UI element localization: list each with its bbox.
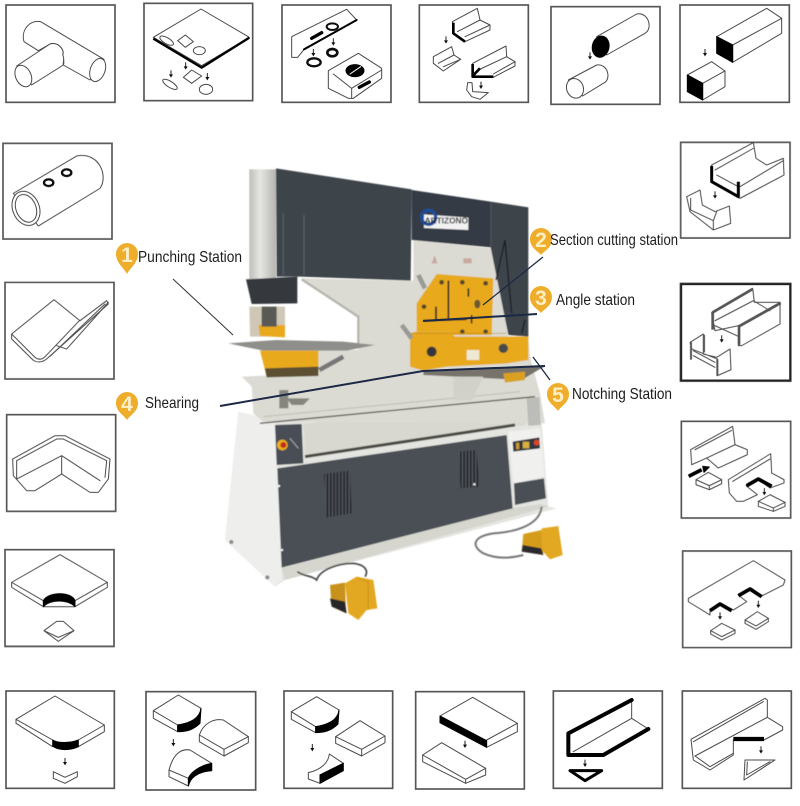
- upper dark covers: [276, 168, 528, 337]
- machine throat arm: [279, 390, 310, 408]
- panel: tube punching: [3, 143, 112, 239]
- panel: angle corner notch: [682, 691, 791, 788]
- panel: tee pipe: [6, 5, 115, 102]
- panel: round bar cutting: [551, 7, 660, 104]
- callout 4: shearing: Shearing: [145, 395, 199, 412]
- control box: [508, 428, 546, 505]
- brand logo: [422, 210, 468, 230]
- callout 5: notching station: 5: [552, 384, 564, 407]
- foot pedal left: [297, 563, 377, 620]
- punch column: [249, 169, 276, 279]
- callout 5: notching station: [547, 383, 672, 411]
- callout 1: punching station: Punching Station: [138, 249, 242, 266]
- leader lines: [173, 257, 550, 406]
- callout 2: section cutting station: 2: [535, 229, 547, 252]
- brand logo: ARTIZONO: [425, 216, 468, 225]
- callout 1: punching station: [116, 243, 242, 274]
- panel: plate corner notch: [6, 691, 114, 788]
- panel: angle profile: [7, 415, 116, 511]
- machine base cabinet: [225, 400, 563, 620]
- callout 2: section cutting station: [530, 228, 678, 255]
- panel: flat bar cutting: [416, 692, 524, 789]
- panel: plate punching: [144, 3, 253, 101]
- callout 3: angle station: Angle station: [556, 292, 635, 309]
- machine: iron worker: [225, 168, 563, 620]
- pictogram column: left: [3, 143, 116, 646]
- callout 4: shearing: 4: [121, 393, 133, 416]
- panel: bent plate: [5, 282, 114, 379]
- front door panel: [277, 435, 513, 568]
- panel: strip notching: [683, 551, 791, 648]
- punching table: [228, 340, 375, 377]
- shear tooling: [423, 366, 545, 401]
- machine upper frame: [228, 168, 545, 426]
- panel: channel cutting: [681, 142, 790, 238]
- panel: radius cut convex: [146, 692, 256, 790]
- foot pedal right: [476, 507, 563, 559]
- pictogram row: top: [6, 3, 391, 102]
- panel: i-beam cutting: [681, 284, 790, 381]
- panel: radius cut concave: [284, 691, 393, 788]
- data plate: [527, 397, 541, 426]
- yellow section plates: [402, 274, 528, 371]
- callout 3: angle station: 3: [535, 287, 547, 310]
- panel: angle notching: [681, 421, 791, 518]
- emergency stop panel: [275, 424, 303, 465]
- panel: angle cutting: [419, 5, 528, 102]
- panel: square bar cutting: [680, 5, 789, 102]
- callout 3: angle station: [530, 286, 635, 313]
- pictogram column: right: [681, 142, 791, 648]
- punch head: [246, 277, 297, 337]
- callout 2: section cutting station: Section cutting station: [550, 232, 678, 249]
- panel: angle mitre cutting: [553, 691, 662, 788]
- callout 1: punching station: 1: [121, 244, 133, 267]
- callout 5: notching station: Notching Station: [572, 386, 672, 403]
- pictogram row: bottom: [6, 691, 393, 790]
- callout 4: shearing: [116, 392, 199, 420]
- panel: plate notch: [5, 550, 114, 646]
- panel: angle punching: [282, 5, 391, 102]
